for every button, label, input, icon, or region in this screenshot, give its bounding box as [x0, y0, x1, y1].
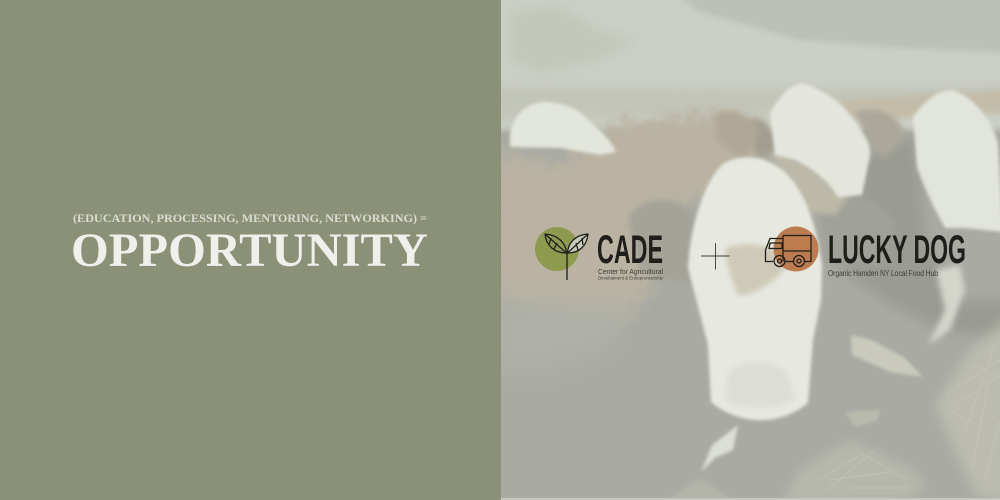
photo: pale wash along bottom edge — [501, 498, 1000, 500]
photo: hillside and treeline — [470, 0, 1000, 130]
photo backdrop — [501, 128, 1000, 498]
photo: dark coats between the cows — [628, 110, 1000, 340]
photo: main cow face — [688, 158, 822, 420]
headline block — [71, 212, 428, 277]
subheading: list of services: (EDUCATION, PROCESSING, MENTORING, NETWORKING) = — [73, 212, 427, 225]
photo: white cow right — [913, 90, 1000, 232]
photo: white cow back centre — [770, 83, 870, 197]
photo: muzzle — [727, 364, 792, 406]
tagline: organic hamden: Organic Hamden NY Local Food Hub — [828, 269, 939, 278]
photo: white cow far left — [510, 102, 616, 155]
logo: CADE — [535, 227, 663, 280]
right panel: faded cattle photo — [470, 0, 1000, 500]
left panel: green background — [0, 0, 501, 500]
title: opportunity: OPPORTUNITY — [71, 224, 428, 277]
logo: Lucky Dog — [766, 226, 966, 278]
wordmark: CADE: CADE — [597, 228, 663, 272]
icon: olive circle with sprouting leaves — [535, 227, 588, 280]
photo: brown fleece of the cows — [501, 90, 1000, 322]
photo: scraps of white and hay — [660, 265, 1000, 500]
tagline: center for agricultural: Center for Agricultural — [598, 267, 663, 276]
tagline: development and entrepreneurship: Development & Entrepreneurship — [598, 276, 663, 280]
photo: hay strands — [810, 345, 1000, 492]
plus sign between logos — [701, 243, 730, 270]
icon: orange circle with delivery truck — [766, 226, 818, 272]
photo: brown patch on forehead — [725, 244, 790, 295]
